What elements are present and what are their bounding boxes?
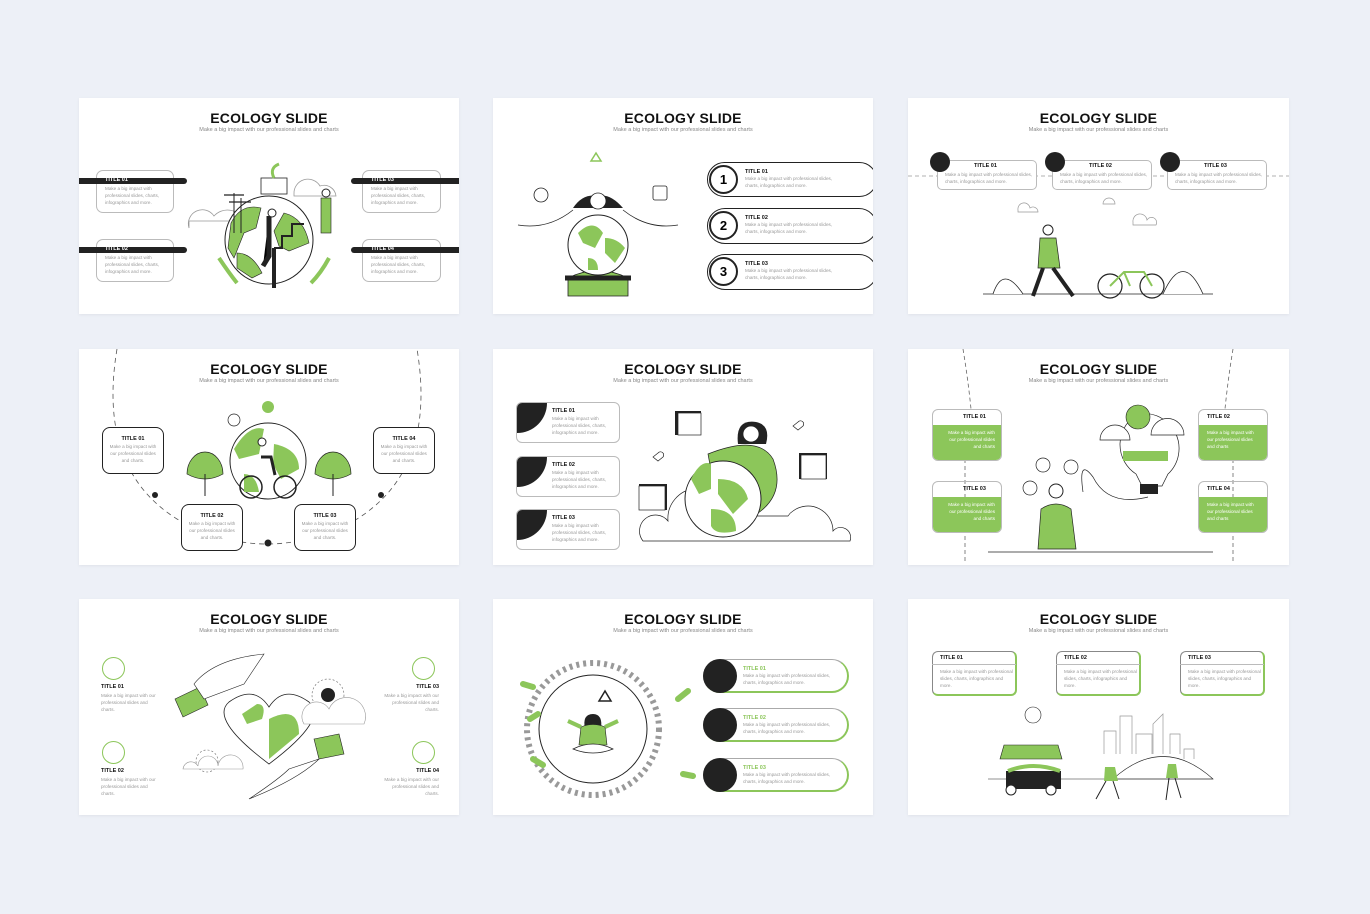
item 3: Make a big impact with professional slides, charts, infographics and more. [745,268,832,280]
item: title 02 [1056,651,1141,696]
item 1: 1 [720,172,727,187]
slide 4: cyclist globe with arc [79,349,459,565]
slide 5: hugging globe [493,349,873,565]
heading: ECOLOGY SLIDE [1040,361,1157,377]
item: title 04: Make a big impact with our professional slides and charts. [384,777,439,796]
item: title 02: TITLE 02 [201,513,223,519]
heading [199,361,339,384]
heading [1029,611,1168,634]
item: title 04 [1198,481,1268,533]
heading: ECOLOGY SLIDE [624,611,742,627]
dashed connector [908,176,1289,299]
heading: Make a big impact with our professional slides and charts [1029,628,1168,634]
heading: Make a big impact with our professional slides and charts [199,378,339,384]
heading: ECOLOGY SLIDE [624,110,742,126]
slide 8: meditating circle [493,599,873,815]
item 2: TITLE 02 [745,215,768,221]
item: title 03 [1160,152,1267,190]
item 2: 2 [720,218,727,233]
illustration: globe with stairs [188,162,336,288]
item: title 03: Make a big impact with our professional slides and charts. [384,693,439,712]
heading: Make a big impact with our professional slides and charts [199,628,339,634]
heading: ECOLOGY SLIDE [1040,110,1157,126]
illustration: hands and heart [174,654,366,800]
item: title 01: TITLE 01 [963,414,986,420]
item: title 02: TITLE 02 [1207,414,1230,420]
item 3 [703,758,849,792]
item: title 03: Make a big impact with our professional slides and charts [948,502,995,521]
item 3: 3 [720,264,727,279]
item: title 01 [932,651,1017,696]
item 3: Make a big impact with professional slides, charts, infographics and more. [743,772,830,784]
item: title 02: Make a big impact with our professional slides and charts. [189,521,235,540]
heading [1029,110,1168,133]
item 1: TITLE 01 [743,666,766,672]
item: title 02: Make a big impact with professional slides, charts, infographics and more. [1064,669,1137,688]
item: title 01 [79,170,187,213]
item 1 [707,162,873,197]
item 3: TITLE 03 [743,765,766,771]
illustration: city and market cart [988,706,1214,800]
item: title 03 [1180,651,1266,697]
item: title 03: TITLE 03 [1204,163,1227,169]
heading: ECOLOGY SLIDE [1040,611,1157,627]
heading: Make a big impact with our professional slides and charts [1029,378,1168,384]
item: title 03: Make a big impact with professional slides, charts, infographics and more. [1188,669,1261,688]
item: title 01: TITLE 01 [101,684,124,690]
item: title 01: TITLE 01 [552,408,575,414]
item: title 02: TITLE 02 [1064,655,1087,661]
item: title 03: TITLE 03 [552,515,575,521]
item: title 01 [101,657,156,712]
item: title 03: TITLE 03 [371,177,394,183]
item: title 01: Make a big impact with our professional slides and charts. [110,444,156,463]
heading [613,361,753,384]
item: title 02 [516,456,620,497]
item: title 04: Make a big impact with our professional slides and charts. [381,444,427,463]
item: title 01: TITLE 01 [940,655,963,661]
item 2 [703,708,849,742]
item: title 03: TITLE 03 [1188,655,1211,661]
item: title 02: TITLE 02 [101,768,124,774]
illustration: woman hugging globe [638,411,851,542]
item: title 02: TITLE 02 [105,246,128,252]
item: title 02: Make a big impact with professional slides, charts, infographics and more. [552,470,606,489]
slide 2: numbered list [493,98,873,314]
item: title 04: TITLE 04 [416,768,439,774]
slide 9: city market [908,599,1289,815]
item: title 01: TITLE 01 [105,177,128,183]
item: title 03 [351,170,459,213]
item: title 04 [384,741,440,796]
item 2 [707,208,873,244]
heading [199,110,339,133]
illustration: arc, trees, globe, cyclist [112,349,422,546]
item: title 04: TITLE 04 [393,436,415,442]
item: title 02: Make a big impact with our professional slides and charts [1207,430,1254,449]
item: title 03 [294,504,356,551]
item: title 04 [351,239,459,282]
item: title 03: TITLE 03 [314,513,336,519]
item: title 03 [384,657,439,712]
item 1: Make a big impact with professional slides, charts, infographics and more. [743,673,830,685]
item: title 01 [932,409,1002,461]
item: title 04 [373,427,435,474]
item: title 01: Make a big impact with our professional slides and charts [948,430,995,449]
slide 3: three titles with walking person [908,98,1289,314]
item: title 01 [516,402,620,443]
slide 6: lightbulb [908,349,1289,565]
item 3 [707,254,873,290]
heading [613,110,753,133]
heading: ECOLOGY SLIDE [210,361,328,377]
heading: Make a big impact with our professional slides and charts [1029,127,1168,133]
item: title 01: Make a big impact with our professional slides and charts. [101,693,156,712]
item: title 03: TITLE 03 [416,684,439,690]
item: title 04: TITLE 04 [1207,486,1230,492]
item: title 03: Make a big impact with professional slides, charts, infographics and more. [552,523,606,542]
heading: ECOLOGY SLIDE [210,611,328,627]
item 2: TITLE 02 [743,715,766,721]
slide 1: stairs globe [79,98,459,314]
item: title 01 [930,152,1037,190]
item: title 03: Make a big impact with professional slides, charts, infographics and more. [371,186,425,205]
heading: Make a big impact with our professional slides and charts [613,127,753,133]
item 3: TITLE 03 [745,261,768,267]
item: title 01 [102,427,164,474]
item: title 01: TITLE 01 [122,436,144,442]
heading: ECOLOGY SLIDE [210,110,328,126]
item: title 02 [79,239,187,282]
item: title 02: TITLE 02 [1089,163,1112,169]
item: title 03: Make a big impact with professional slides, charts, infographics and more. [1175,172,1262,184]
item: title 03 [932,481,1002,533]
item: title 04: TITLE 04 [371,246,394,252]
heading: Make a big impact with our professional slides and charts [613,378,753,384]
heading: Make a big impact with our professional slides and charts [613,628,753,634]
item: title 03 [516,509,620,550]
item 1: Make a big impact with professional slides, charts, infographics and more. [745,176,832,188]
illustration: city ring and meditating woman [520,660,696,798]
item 1: TITLE 01 [745,169,768,175]
illustration: person holding globe [518,152,678,296]
item: title 02 [101,741,156,796]
item: title 01: Make a big impact with professional slides, charts, infographics and more. [552,416,606,435]
item 2: Make a big impact with professional slides, charts, infographics and more. [743,722,830,734]
heading: Make a big impact with our professional slides and charts [199,127,339,133]
item: title 01: Make a big impact with professional slides, charts, infographics and more. [105,186,159,205]
heading [613,611,753,634]
item 1 [703,659,849,693]
item 2: Make a big impact with professional slides, charts, infographics and more. [745,222,832,234]
illustration: person with lightbulb [962,349,1234,561]
item: title 02: Make a big impact with our professional slides and charts. [101,777,156,796]
heading: ECOLOGY SLIDE [624,361,742,377]
item: title 01: Make a big impact with professional slides, charts, infographics and more. [945,172,1032,184]
heading [199,611,339,634]
item: title 02: Make a big impact with professional slides, charts, infographics and more. [105,255,159,274]
item: title 02 [1198,409,1268,461]
item: title 01: TITLE 01 [974,163,997,169]
item: title 02 [181,504,243,551]
item: title 04: Make a big impact with our professional slides and charts [1207,502,1254,521]
item: title 03: TITLE 03 [963,486,986,492]
item: title 02 [1045,152,1152,190]
item: title 01: Make a big impact with professional slides, charts, infographics and more. [940,669,1013,688]
item: title 03: Make a big impact with our professional slides and charts. [302,521,348,540]
item: title 04: Make a big impact with professional slides, charts, infographics and more. [371,255,425,274]
heading [1029,361,1168,384]
item: title 02: Make a big impact with professional slides, charts, infographics and more. [1060,172,1147,184]
slide 7: hands and heart globe [79,599,459,815]
item: title 02: TITLE 02 [552,462,575,468]
